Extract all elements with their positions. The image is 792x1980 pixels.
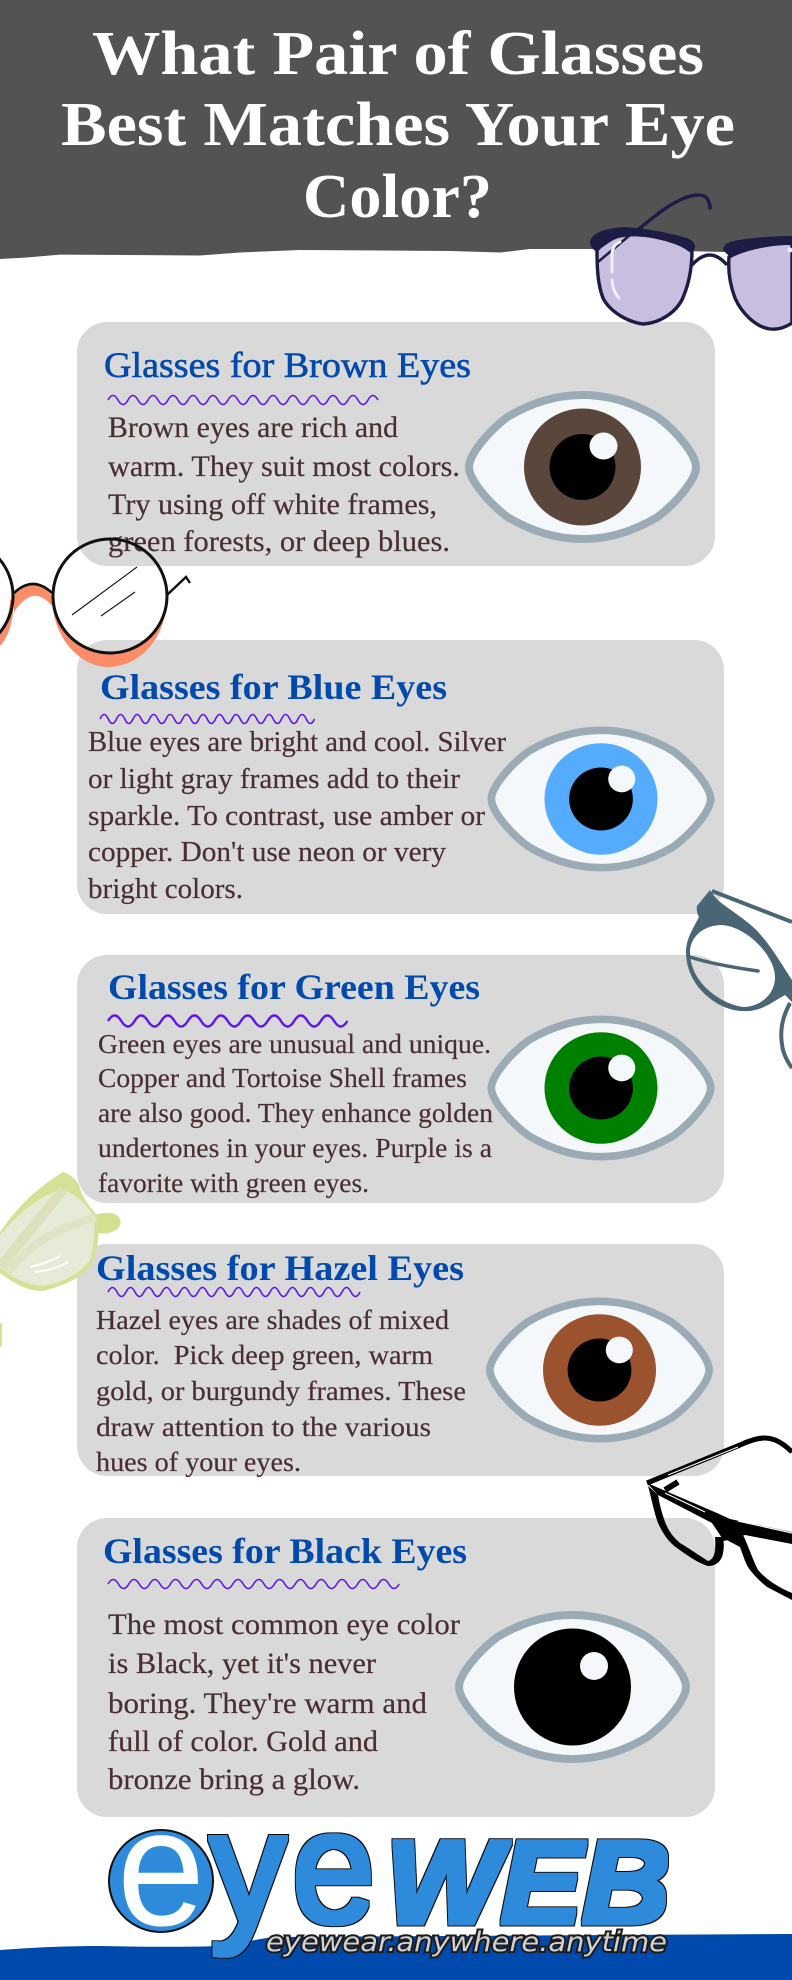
body text: hazel eyes: draw attention to the various <box>96 1411 431 1442</box>
body text: blue eyes: Blue eyes are bright and cool. Silver <box>88 727 507 758</box>
body text: blue eyes: bright colors. <box>88 874 243 905</box>
body text: green eyes: Green eyes are unusual and unique. <box>98 1028 491 1059</box>
body text: hazel eyes: Hazel eyes are shades of mixed <box>96 1304 449 1335</box>
body text: brown eyes <box>108 412 460 558</box>
body text: hazel eyes: color. Pick deep green, warm <box>96 1339 433 1370</box>
logo tagline: eyewear.anywhere.anytime <box>266 1927 667 1958</box>
decoration: purple glasses <box>590 195 792 329</box>
logo: eyeWEB: e <box>292 1777 375 1956</box>
icon: green eye <box>491 1019 711 1157</box>
heading: green eyes: Glasses for Green Eyes <box>108 967 480 1007</box>
body text: brown eyes: warm. They suit most colors. <box>108 451 460 483</box>
body text: brown eyes: Brown eyes are rich and <box>108 412 398 444</box>
logo: eyeWEB: e <box>117 1775 205 1961</box>
logo: eyeWEB: WEB <box>386 1817 670 1949</box>
body text: blue eyes: copper. Don't use neon or very <box>88 837 446 868</box>
decoration: green glasses <box>0 1172 121 1347</box>
squiggle underline <box>108 1580 399 1588</box>
icon: blue eye <box>491 730 711 868</box>
title: What Pair of Glasses <box>92 20 704 88</box>
squiggle underline <box>108 1016 347 1026</box>
icon: hazel eye <box>490 1301 709 1439</box>
body text: black eyes: The most common eye color <box>108 1609 460 1641</box>
body text: blue eyes: or light gray frames add to their <box>88 764 461 795</box>
body text: green eyes <box>98 1028 493 1198</box>
panel: green eyes <box>77 955 724 1203</box>
body text: green eyes: are also good. They enhance golden <box>98 1097 493 1128</box>
body text: black eyes: full of color. Gold and <box>108 1726 378 1758</box>
icon: black eye <box>459 1615 686 1759</box>
squiggle underline <box>100 714 314 724</box>
title: Color? <box>303 163 492 231</box>
heading: black eyes: Glasses for Black Eyes <box>103 1531 467 1571</box>
decoration: teal glasses <box>686 890 792 1068</box>
decoration: black glasses <box>647 1438 792 1600</box>
body text: hazel eyes: hues of your eyes. <box>96 1446 301 1477</box>
squiggle underline <box>108 1288 360 1296</box>
body text: hazel eyes <box>96 1304 466 1477</box>
heading: blue eyes: Glasses for Blue Eyes <box>100 667 447 707</box>
heading: hazel eyes: Glasses for Hazel Eyes <box>96 1248 464 1288</box>
body text: green eyes: favorite with green eyes. <box>98 1167 369 1198</box>
body text: black eyes: is Black, yet it's never <box>108 1648 376 1680</box>
bottom wave <box>0 1934 792 1980</box>
panel: black eyes <box>77 1518 715 1817</box>
panel: blue eyes <box>77 640 724 914</box>
body text: black eyes <box>108 1609 460 1796</box>
body text: black eyes: bronze bring a glow. <box>108 1764 360 1796</box>
panel: brown eyes <box>77 322 715 566</box>
heading: brown eyes: Glasses for Brown Eyes <box>104 345 471 385</box>
body text: blue eyes <box>88 727 507 905</box>
body text: hazel eyes: gold, or burgundy frames. These <box>96 1375 466 1406</box>
panel: hazel eyes <box>77 1244 724 1477</box>
body text: blue eyes: sparkle. To contrast, use amber or <box>88 801 486 832</box>
title <box>61 20 735 231</box>
decoration: orange round glasses <box>0 539 190 667</box>
logo: eyeWEB: y <box>210 1777 286 1956</box>
squiggle underline <box>108 396 378 404</box>
body text: brown eyes: green forests, or deep blues. <box>108 526 450 558</box>
icon: brown eye <box>469 395 696 539</box>
title: Best Matches Your Eye <box>61 91 735 159</box>
body text: brown eyes: Try using off white frames, <box>108 489 437 521</box>
header background <box>0 0 792 259</box>
logo: eyeWEB <box>109 1775 670 1961</box>
body text: black eyes: boring. They're warm and <box>108 1688 427 1720</box>
body text: green eyes: Copper and Tortoise Shell frames <box>98 1062 467 1093</box>
body text: green eyes: undertones in your eyes. Purple is a <box>98 1132 492 1163</box>
